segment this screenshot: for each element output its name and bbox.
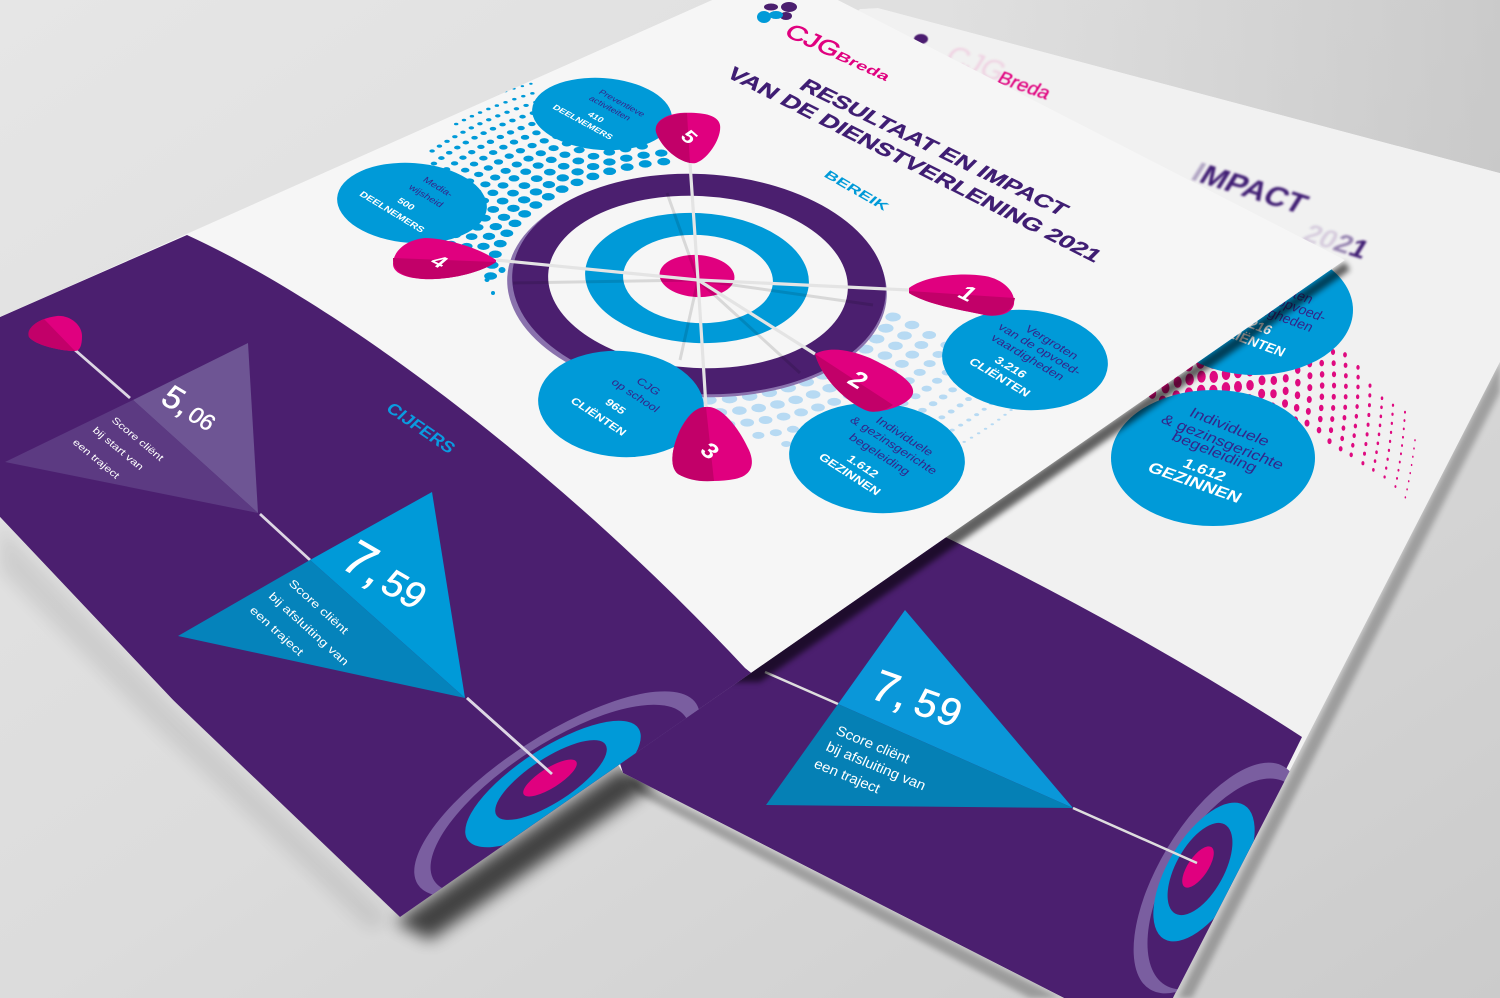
triangle: score 7,59: bij afsluiting van (266, 590, 352, 668)
back title (1190, 162, 1368, 260)
logo: CJG Breda (757, 2, 894, 84)
dart 4 (393, 238, 496, 279)
back circle: opvoedvaardigheden: 3.216 (1235, 312, 1276, 338)
triangle: score 5,06: 5,06 (154, 379, 225, 438)
back circle: opvoedvaardigheden (1198, 270, 1353, 375)
triangle: score 7,59: een traject (247, 604, 307, 658)
back triangle 7,59: 7,59 (864, 661, 972, 737)
circle: preventieve activiteiten: activiteiten (587, 94, 633, 122)
triangle: score 7,59: Score cliënt (286, 577, 352, 637)
back circle: opvoedvaardigheden: Vergroten (1252, 272, 1317, 307)
pointer line (74, 350, 524, 748)
circle: preventieve activiteiten: 410 (586, 110, 606, 124)
dart 5: 5 (676, 126, 702, 148)
dart string shadows (513, 193, 873, 373)
triangle: score 5,06: een traject (70, 437, 121, 481)
circle: vergroten opvoedvaardigheden: 3.216 (992, 354, 1030, 381)
back circle: individuele begeleiding: GEZINNEN (1144, 459, 1246, 506)
circle: vergroten opvoedvaardigheden: vaardigheden (988, 332, 1067, 383)
circle: CJG op school: 965 (602, 397, 629, 417)
back triangle 7,59: een traject (811, 756, 882, 797)
back logo (914, 34, 1055, 104)
circle: mediawijsheid: DEELNEMERS (357, 190, 427, 235)
target (507, 174, 887, 398)
circle: vergroten opvoedvaardigheden: Vergroten (1022, 323, 1081, 362)
heading: BEREIK: BEREIK (821, 168, 892, 213)
triangle: score 5,06: bij start van (90, 425, 146, 472)
back target (1134, 762, 1290, 994)
dart 3: 3 (694, 438, 725, 464)
triangle: score 5,06 (5, 343, 258, 513)
back triangle 7,59: Score cliënt (833, 723, 912, 767)
circle: preventieve activiteiten: Preventieve (597, 88, 647, 118)
halftone: blue dots (420, 83, 671, 276)
back halftone: pink dots (1148, 341, 1415, 499)
back triangle 7,59 (766, 610, 1073, 808)
shadow of front poster on back poster (730, 262, 1350, 682)
halftone: light blue dots (702, 312, 1013, 447)
dart 3 (672, 407, 752, 481)
back pointer line (765, 672, 1197, 863)
circle: CJG op school: CLIËNTEN (568, 395, 629, 438)
circle: mediawijsheid (337, 162, 487, 243)
halftone: small blue dots below dart 4 (484, 267, 506, 295)
back title: IMPACT (1186, 158, 1314, 220)
circle: individuele begeleiding: Individuele (873, 414, 936, 458)
logo: CJG Breda: Breda (832, 49, 894, 84)
dart 2: 2 (842, 367, 874, 394)
back circle: individuele begeleiding (1111, 390, 1315, 526)
back circle: individuele begeleiding: Individuele (1186, 405, 1273, 450)
circle: preventieve activiteiten (532, 78, 672, 150)
dart 1: 1 (952, 281, 983, 306)
circle: individuele begeleiding: begeleiding (846, 431, 913, 478)
circle: individuele begeleiding: GEZINNEN (816, 451, 883, 498)
triangle: score 7,59: 7,59 (331, 530, 442, 619)
back paper (618, 8, 1500, 998)
back circle: individuele begeleiding: 1.612 (1180, 456, 1229, 485)
circle: individuele begeleiding: 1.612 (844, 453, 881, 480)
panel: back poster (618, 8, 1500, 998)
back circle: opvoedvaardigheden: CLIËNTEN (1215, 322, 1289, 360)
circle: mediawijsheid: wijsheid (405, 183, 445, 210)
dart 1 (909, 274, 1015, 316)
circle: mediawijsheid: 500 (395, 196, 417, 213)
dart pin (28, 316, 82, 351)
circle: CJG op school: op school (609, 377, 662, 415)
title: VAN DE DIENSTVERLENING 2021 (722, 63, 1108, 266)
back circle: opvoedvaardigheden: van de opvoed- (1232, 278, 1330, 325)
ground shadows (0, 362, 1500, 998)
dart 4: 4 (425, 252, 453, 272)
back purple footer (600, 515, 1302, 998)
back logo: CJG (939, 41, 1012, 88)
title: RESULTAAT EN IMPACT (795, 75, 1074, 220)
circle: mediawijsheid: Media- (420, 176, 455, 199)
back circle: opvoedvaardigheden: vaardigheden (1230, 292, 1317, 335)
triangle: score 5,06: Score cliënt (109, 415, 166, 463)
circle: CJG op school (538, 350, 704, 458)
back title: 2021 (1298, 219, 1375, 264)
heading: CIJFERS: CIJFERS (382, 399, 460, 457)
circle: individuele begeleiding: & gezinsgerichte (847, 414, 940, 477)
back logo: Breda (993, 68, 1055, 104)
dart strings (496, 163, 909, 407)
circle: vergroten opvoedvaardigheden: CLIËNTEN (966, 355, 1034, 399)
circle: individuele begeleiding (789, 404, 965, 514)
triangle: score 7,59 (178, 492, 465, 698)
dart 5 (656, 113, 720, 163)
back circle: individuele begeleiding: & gezinsgerichte (1158, 411, 1287, 473)
bottom target (414, 691, 699, 894)
circle: vergroten opvoedvaardigheden: van de opvoed- (995, 321, 1084, 378)
purple footer (0, 235, 760, 930)
dart 2 (815, 350, 913, 412)
circle: CJG op school: CJG (634, 376, 663, 398)
back circle: individuele begeleiding: begeleiding (1168, 429, 1260, 476)
circle: preventieve activiteiten: DEELNEMERS (551, 103, 615, 141)
logo: CJG Breda: CJG (780, 20, 846, 62)
circle: vergroten opvoedvaardigheden (942, 310, 1108, 410)
back triangle 7,59: bij afsluiting van (823, 739, 928, 794)
